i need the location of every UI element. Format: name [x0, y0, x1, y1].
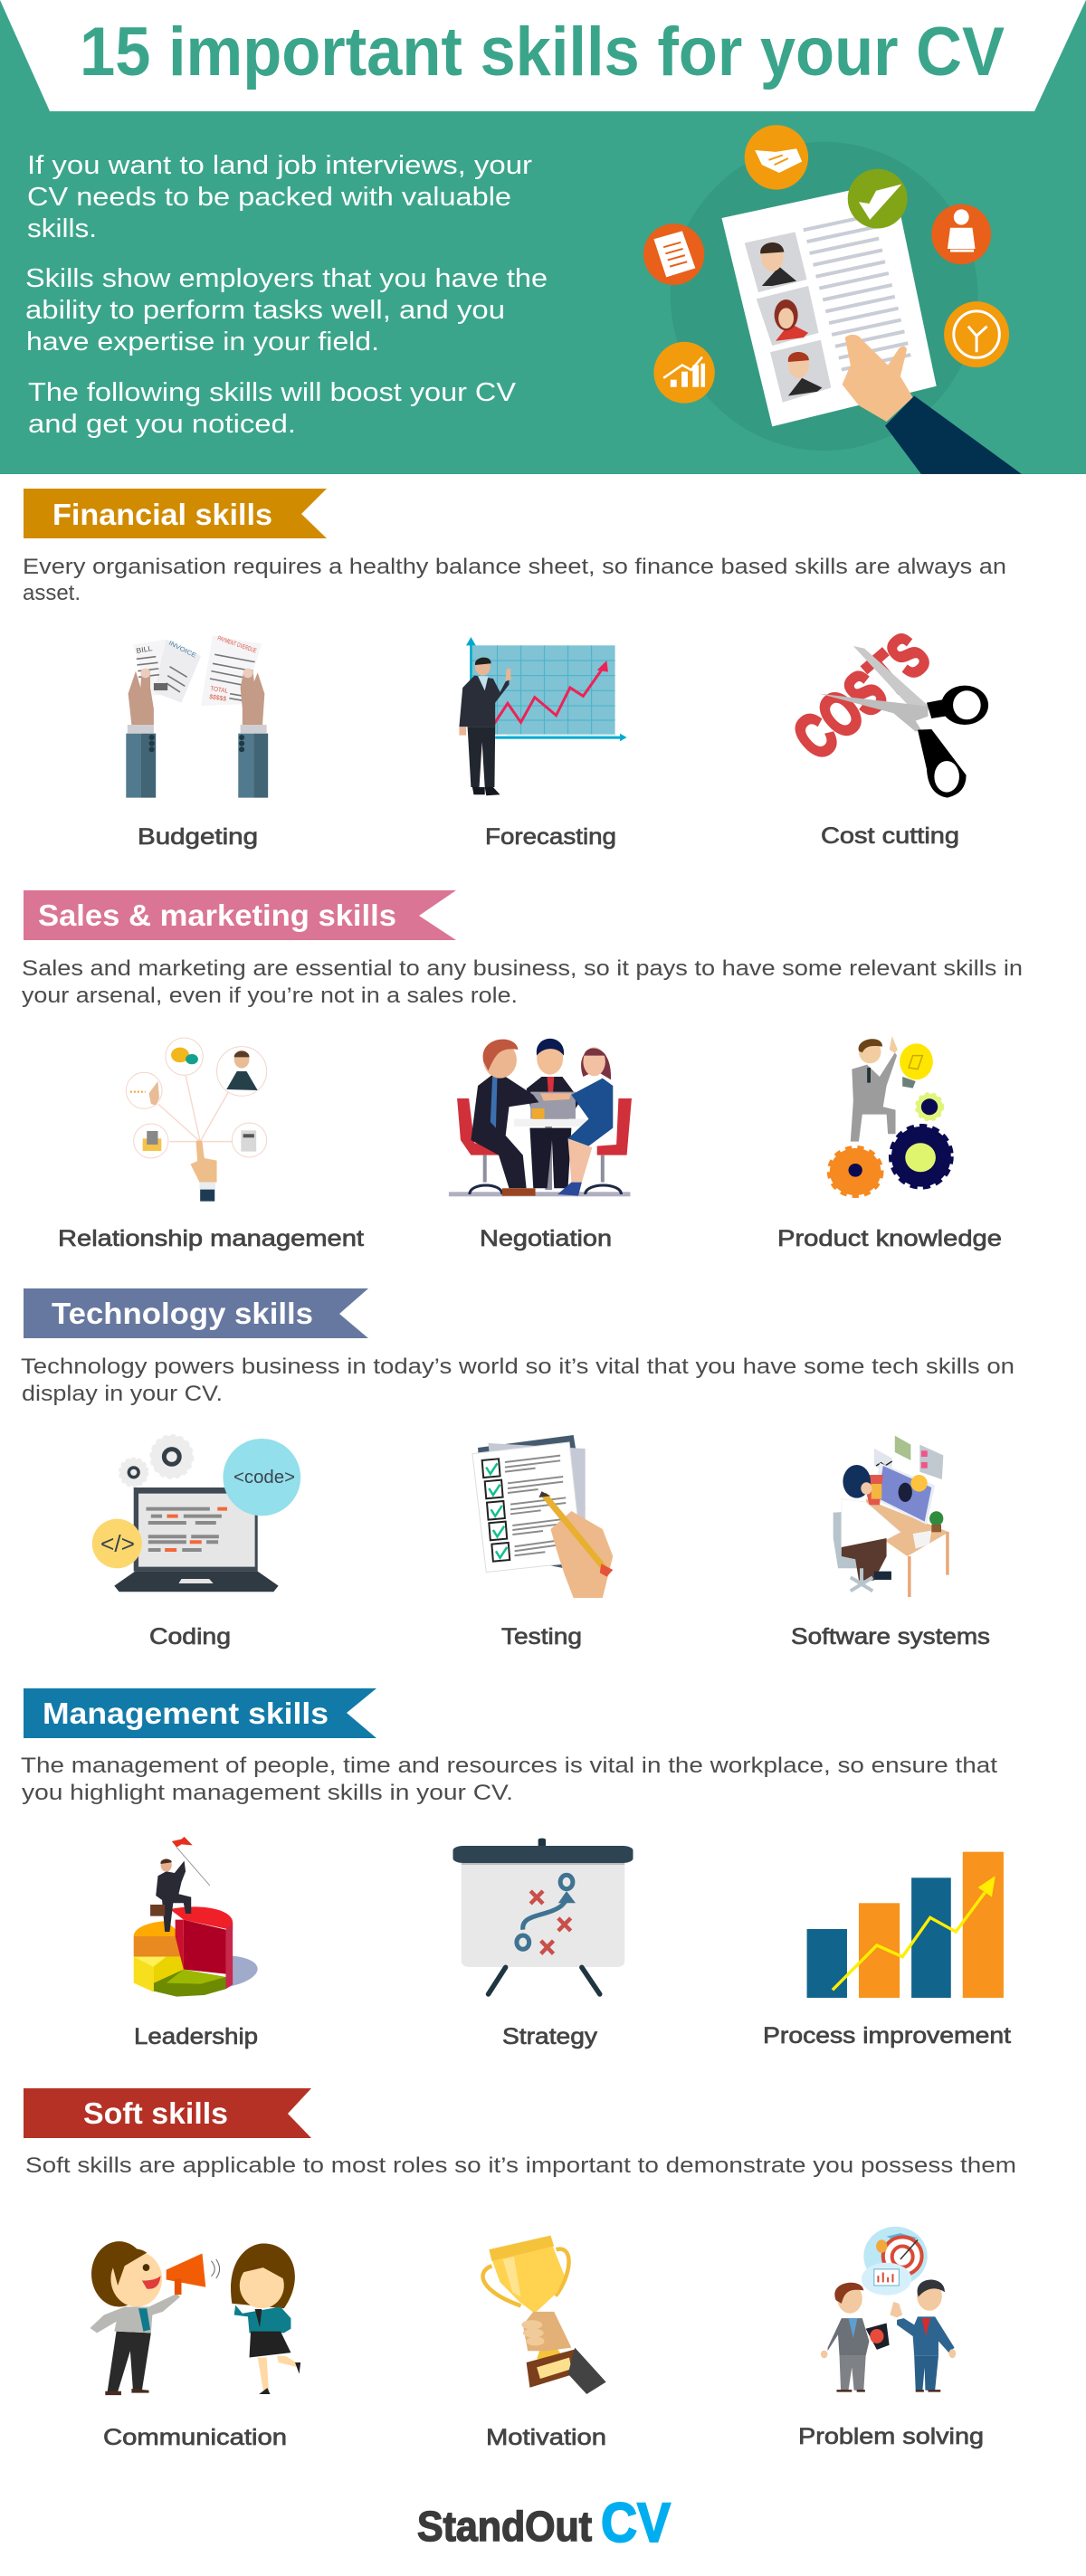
- heading: soft: Soft skills: [83, 2096, 228, 2130]
- label: communication: Communication: [103, 2425, 287, 2450]
- icon: forecasting: [459, 637, 627, 795]
- description: financial: asset.: [23, 581, 81, 605]
- icon: coding: [92, 1436, 300, 1592]
- icon: strategy: [453, 1839, 633, 1994]
- icon: budgeting: [126, 635, 268, 798]
- icon: budgeting: $$$$$: [209, 694, 227, 703]
- icon: coding: <code>: [233, 1468, 295, 1488]
- icon: budgeting: PAYMENT OVERDUE: [216, 635, 257, 655]
- description: management: The management of people, time and resources is vital in the workplace, so ensure that: [21, 1754, 997, 1778]
- label: leadership: Leadership: [134, 2024, 258, 2049]
- intro text: If you want to land job interviews, your: [27, 151, 532, 180]
- section: technology skills: [21, 1288, 1015, 1649]
- illustration: CV with icons: [643, 125, 1022, 474]
- logo: StandOut CV: [417, 2492, 671, 2553]
- section: financial skills: [23, 489, 1006, 850]
- description: financial: Every organisation requires a healthy balance sheet, so finance based skills are always an: [23, 555, 1006, 579]
- description: sales: your arsenal, even if you’re not in a sales role.: [22, 984, 518, 1008]
- label: forecasting: Forecasting: [485, 824, 616, 850]
- icon: process improvement: [807, 1852, 1004, 1998]
- banner: technology: [24, 1288, 368, 1338]
- icon: relationship management: [126, 1038, 267, 1202]
- intro text: Skills show employers that you have the: [25, 264, 548, 293]
- description: management: you highlight management skills in your CV.: [22, 1781, 513, 1805]
- panel: header: [0, 0, 1086, 474]
- label: product knowledge: Product knowledge: [777, 1226, 1002, 1251]
- icon: leadership: [134, 1837, 258, 1997]
- intro text: skills.: [27, 214, 97, 243]
- icon: communication: [90, 2241, 300, 2395]
- label: coding: Coding: [149, 1624, 231, 1649]
- intro text: CV needs to be packed with valuable: [27, 183, 511, 212]
- banner: financial: [24, 489, 327, 538]
- icon: software systems: [834, 1436, 948, 1597]
- description: sales: [22, 956, 1023, 1008]
- icon: budgeting: TOTAL: [210, 686, 229, 695]
- title banner: [0, 0, 1086, 111]
- description: technology: Technology powers business in today’s world so it’s vital that you have some tech skills on: [21, 1355, 1015, 1379]
- intro text: ability to perform tasks well, and you: [25, 296, 505, 325]
- section: management skills: [21, 1688, 1011, 2049]
- heading: financial: Financial skills: [52, 498, 272, 531]
- description: soft: Soft skills are applicable to most roles so it’s important to demonstrate you possess them: [25, 2153, 1016, 2178]
- label: negotiation: Negotiation: [480, 1226, 612, 1251]
- description: financial: [23, 555, 1006, 605]
- banner: management: [24, 1688, 376, 1738]
- banner: sales: [24, 890, 456, 940]
- logo: StandOut CV: StandOut: [417, 2503, 592, 2550]
- label: motivation: Motivation: [486, 2425, 606, 2450]
- intro text: [25, 151, 548, 439]
- intro text: have expertise in your field.: [26, 328, 379, 356]
- banner: soft: [24, 2088, 311, 2138]
- label: budgeting: Budgeting: [138, 824, 258, 850]
- heading: technology: Technology skills: [52, 1297, 313, 1330]
- icon: cost cutting: COSTS: [781, 620, 942, 773]
- description: technology: [21, 1355, 1015, 1406]
- label: strategy: Strategy: [502, 2024, 598, 2049]
- icon: problem solving: [821, 2227, 956, 2391]
- heading: sales: Sales & marketing skills: [38, 898, 396, 932]
- description: sales: Sales and marketing are essential to any business, so it pays to have some relevant skills in: [22, 956, 1023, 981]
- title: 15 important skills for your CV: [80, 14, 1005, 90]
- icon: motivation: [482, 2236, 606, 2394]
- icon: budgeting: INVOICE: [167, 641, 197, 660]
- label: software systems: Software systems: [791, 1624, 990, 1649]
- icon: product knowledge: [830, 1036, 951, 1195]
- description: technology: display in your CV.: [22, 1382, 223, 1406]
- icon: coding: </>: [100, 1530, 135, 1557]
- intro text: and get you noticed.: [28, 410, 296, 439]
- label: process improvement: Process improvement: [763, 2023, 1011, 2048]
- icon: negotiation: [449, 1039, 632, 1196]
- intro text: The following skills will boost your CV: [28, 378, 517, 407]
- icon: budgeting: BILL: [136, 644, 154, 655]
- description: management: [21, 1754, 997, 1805]
- label: testing: Testing: [501, 1624, 582, 1649]
- section: soft skills: [24, 2088, 1016, 2450]
- heading: management: Management skills: [43, 1697, 329, 1730]
- label: relationship management: Relationship management: [58, 1226, 364, 1251]
- logo: StandOut CV: CV: [601, 2492, 671, 2553]
- section: sales and marketing skills: [22, 890, 1023, 1251]
- label: cost cutting: Cost cutting: [821, 823, 959, 849]
- icon: testing: [472, 1435, 613, 1598]
- label: problem solving: Problem solving: [798, 2424, 984, 2449]
